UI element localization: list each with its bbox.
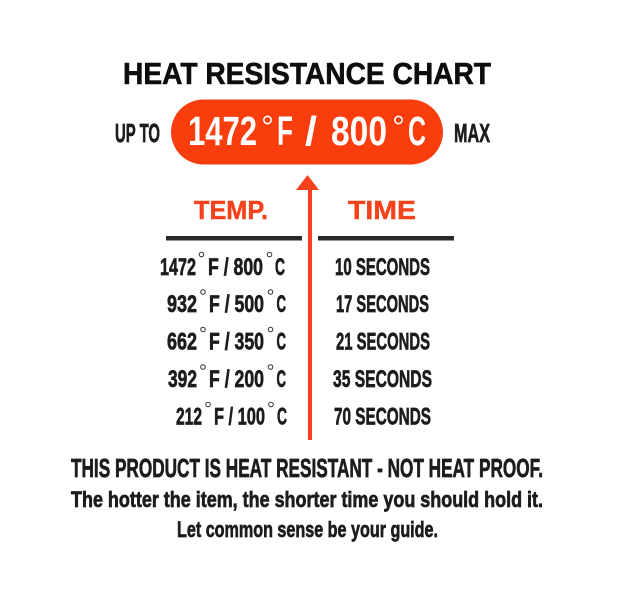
temperature row 2: C — [276, 291, 286, 318]
maximum temperature pill: / — [305, 108, 317, 154]
temperature row 1: F / 800 — [208, 254, 263, 281]
time row 5: 70 SECONDS — [334, 404, 431, 430]
chart content — [71, 57, 543, 542]
temperature row 4: 392 — [168, 366, 197, 393]
temperature row 5: C — [277, 404, 287, 430]
time row 3: 21 SECONDS — [336, 328, 430, 356]
temperature row 3: C — [276, 328, 286, 356]
maximum temperature pill: C — [408, 108, 426, 154]
maximum temperature pill — [171, 100, 443, 164]
maximum temperature pill: 1472 — [188, 108, 257, 154]
arrow pointing up to pill — [296, 175, 319, 440]
temperature row 4: C — [276, 366, 286, 393]
label: max: MAX — [454, 118, 490, 148]
temperature row 4: F / 200 — [209, 366, 264, 393]
header rule: time — [318, 236, 454, 240]
time row 2: 17 SECONDS — [336, 291, 429, 318]
temperature row 2 — [167, 290, 286, 318]
time row 1: 10 SECONDS — [335, 254, 430, 281]
title: HEAT RESISTANCE CHART — [123, 57, 491, 91]
temperature row 3: F / 350 — [209, 328, 264, 356]
temperature row 3: 662 — [167, 328, 197, 356]
temperature row 5 — [176, 402, 287, 430]
temperature row 3 — [167, 327, 286, 356]
column heading: temp: TEMP. — [194, 195, 268, 225]
maximum temperature pill: F — [277, 108, 293, 154]
temperature row 4 — [168, 365, 286, 393]
temperature row 1: C — [275, 254, 285, 281]
temperature row 1 — [160, 252, 285, 281]
closing line: Let common sense be your guide. — [177, 517, 438, 542]
header rule: temp — [166, 236, 302, 240]
temperature row 1: 1472 — [160, 254, 196, 281]
temperature row 5: 212 — [176, 404, 202, 430]
maximum temperature pill: 800 — [331, 108, 387, 154]
time row 4: 35 SECONDS — [333, 366, 432, 393]
temperature row 5: F / 100 — [214, 404, 265, 430]
temperature row 2: F / 500 — [209, 291, 264, 318]
column heading: time: TIME — [348, 195, 416, 225]
label: up to: UP TO — [115, 118, 160, 148]
temperature row 2: 932 — [167, 291, 197, 318]
